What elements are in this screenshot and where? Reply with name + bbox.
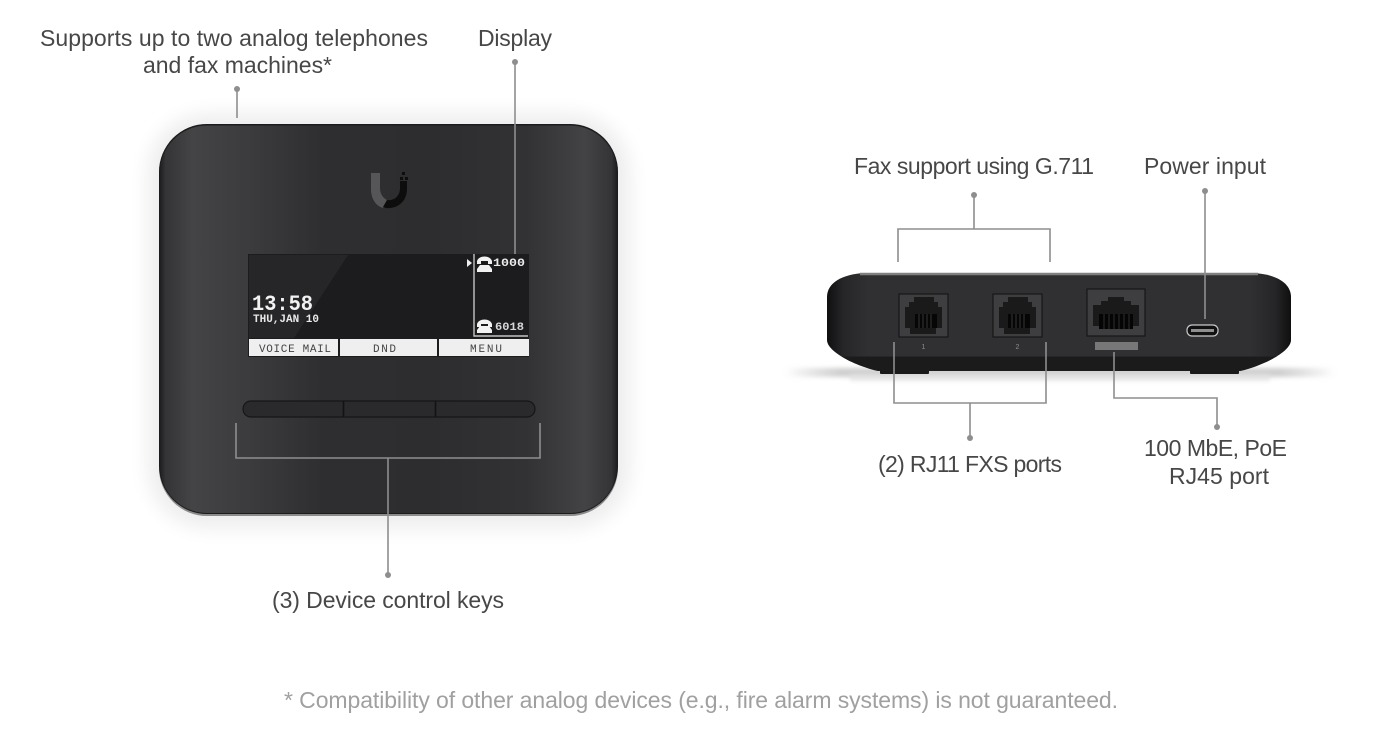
callout: RJ45 port: 100 MbE, PoE — [1144, 435, 1287, 461]
soft key label: voice mail — [249, 339, 338, 356]
icon: telephone line 1 — [477, 256, 492, 272]
device front body — [159, 124, 618, 516]
line status panel — [467, 254, 528, 336]
callout: RJ45 port — [1114, 352, 1287, 489]
floor shadow — [785, 368, 1335, 381]
soft key label: menu — [439, 339, 529, 356]
line status panel: 1000 — [493, 258, 525, 270]
clock: 13:58 — [252, 292, 313, 317]
icon: telephone line 2 — [477, 320, 492, 333]
port: RJ11 2: 2 — [1016, 344, 1020, 351]
port: RJ11 1: 1 — [922, 344, 926, 351]
soft key label: voice mail: VOICE MAIL — [259, 344, 331, 356]
soft key label: DND: DND — [373, 344, 396, 356]
panel: front view of device — [148, 114, 630, 528]
port label — [1095, 342, 1138, 350]
port: RJ11 2 — [993, 294, 1042, 351]
callout: device control keys — [236, 423, 540, 613]
display screen — [248, 254, 529, 357]
icon: brand logo — [371, 172, 408, 208]
callout: display: Display — [478, 25, 552, 51]
callout: analog telephones: and fax machines* — [143, 52, 332, 78]
callout: analog telephones — [40, 25, 428, 118]
port: RJ45 — [1087, 289, 1145, 350]
callout: RJ11 FXS ports — [878, 342, 1062, 477]
callout: fax support — [854, 153, 1094, 262]
callout: power input: Power input — [1144, 153, 1267, 179]
device rear body — [827, 273, 1291, 372]
callout: power input — [1144, 153, 1267, 319]
port: USB-C power — [1187, 325, 1218, 336]
callout: analog telephones: Supports up to two analog telephones — [40, 25, 428, 51]
soft key label: DND — [340, 339, 437, 356]
control keys — [243, 401, 535, 417]
panel: rear view of device — [785, 273, 1335, 381]
callout: RJ11 FXS ports: (2) RJ11 FXS ports — [878, 451, 1062, 477]
callout: device control keys: (3) Device control keys — [272, 587, 504, 613]
port: RJ11 1 — [899, 294, 948, 351]
callout: RJ45 port: RJ45 port — [1169, 463, 1270, 489]
device soft shadow — [148, 114, 630, 528]
callout: display — [478, 25, 552, 254]
date: THU,JAN 10 — [253, 314, 319, 326]
line status panel: 6018 — [495, 322, 524, 334]
soft key label: menu: MENU — [470, 344, 502, 356]
screen glare — [249, 255, 348, 338]
rubber feet — [880, 368, 1239, 374]
footnote: * Compatibility of other analog devices (e.g., fire alarm systems) is not guaranteed. — [284, 687, 1118, 713]
callout: fax support: Fax support using G.711 — [854, 153, 1094, 179]
